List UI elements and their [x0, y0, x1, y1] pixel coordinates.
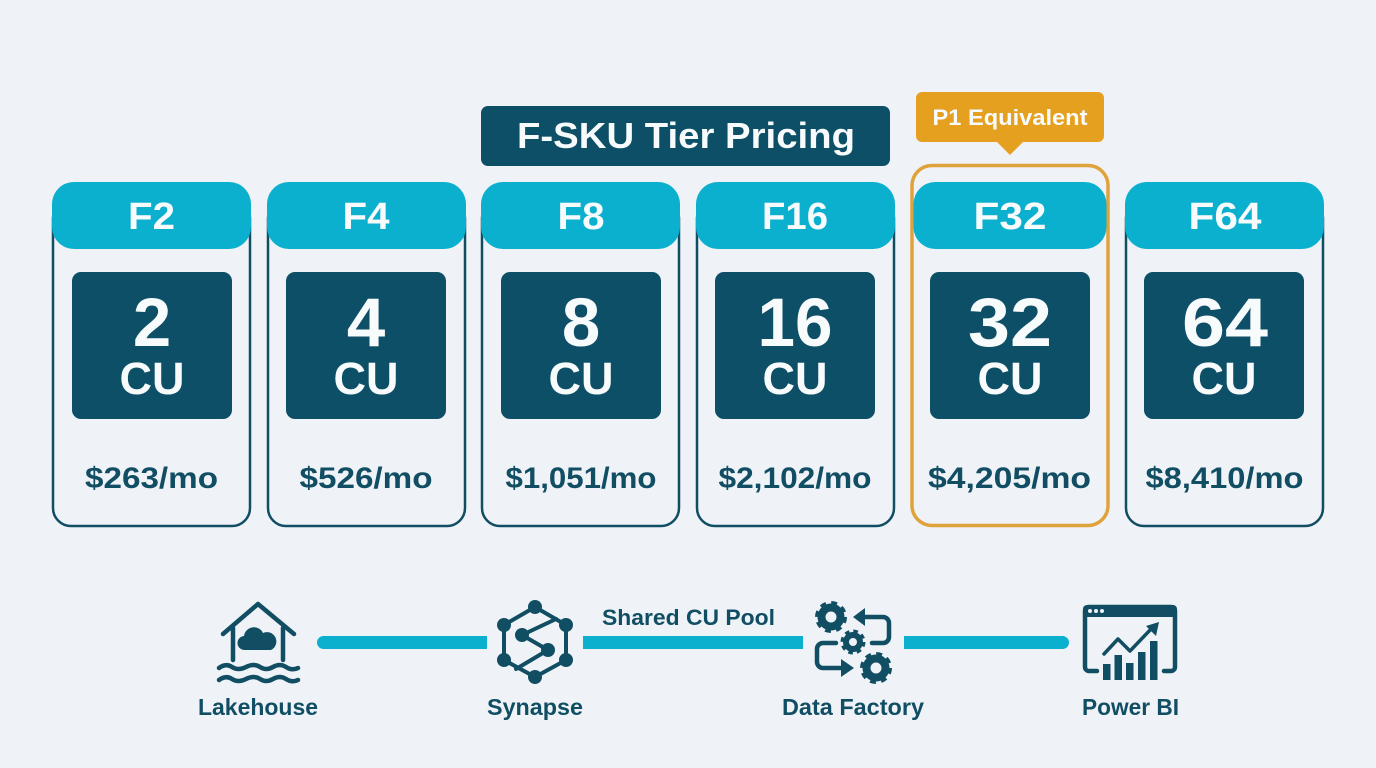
panel: F32 tier highlighted: [912, 166, 1108, 526]
16 CU box: 16: [758, 284, 832, 361]
F2 header: [52, 182, 251, 249]
32 CU box: 32: [968, 284, 1052, 361]
panel: F16 tier: [696, 182, 895, 526]
4 CU box: [286, 272, 446, 419]
8 CU box: CU: [548, 353, 614, 404]
F16 price: $2,102/mo: [718, 462, 872, 495]
2 CU box: CU: [120, 353, 184, 404]
64 CU box: CU: [1192, 353, 1256, 404]
4 CU box: CU: [334, 353, 398, 404]
title: F-SKU Tier Pricing: [517, 115, 855, 156]
label: Lakehouse: [198, 694, 318, 720]
F2 header: F2: [128, 196, 175, 238]
16 CU box: [715, 272, 875, 419]
callout: P1 Equivalent: [916, 92, 1104, 155]
F4 header: [267, 182, 466, 249]
2 CU box: [72, 272, 232, 419]
icon: dashboard window with chart: [1083, 605, 1177, 680]
32 CU box: CU: [978, 353, 1042, 404]
F16 header: [696, 182, 895, 249]
panel: F64 tier: [1125, 182, 1324, 526]
service: Data Factory: [782, 604, 924, 720]
64 CU box: 64: [1182, 284, 1268, 361]
connector: Synapse to Data Factory: [583, 636, 803, 649]
F8 header: F8: [558, 196, 604, 238]
label: Shared CU Pool: Shared CU Pool: [602, 605, 775, 630]
F32 price: $4,205/mo: [928, 462, 1091, 495]
32 CU box: [930, 272, 1090, 419]
64 CU box: [1144, 272, 1304, 419]
title: [481, 106, 890, 166]
icon: lakehouse: [219, 604, 298, 681]
label: Synapse: [487, 694, 583, 720]
F32 header: [914, 182, 1106, 249]
label: Power BI: [1082, 694, 1179, 720]
callout: P1 Equivalent: P1 Equivalent: [932, 105, 1088, 130]
F8 price: $1,051/mo: [506, 462, 656, 495]
panel: F4 tier: [267, 182, 466, 526]
F64 header: [1125, 182, 1324, 249]
icon: gears and arrows: [817, 604, 890, 682]
connector: Data Factory to Power BI: [904, 636, 1069, 649]
F4 price: $526/mo: [300, 462, 432, 495]
8 CU box: 8: [562, 284, 600, 361]
F32 header: F32: [974, 196, 1046, 238]
8 CU box: [501, 272, 661, 419]
4 CU box: 4: [347, 284, 385, 361]
F4 header: F4: [342, 196, 390, 238]
F2 price: $263/mo: [85, 462, 218, 495]
panel: F2 tier: [52, 182, 251, 526]
2 CU box: 2: [133, 284, 171, 361]
label: Data Factory: [782, 694, 924, 720]
F64 header: F64: [1188, 196, 1262, 238]
service: Lakehouse: [198, 604, 318, 720]
connector: Lakehouse to Synapse: [317, 636, 487, 649]
F64 price: $8,410/mo: [1146, 462, 1304, 495]
16 CU box: CU: [762, 353, 828, 404]
service: Power BI: [1082, 605, 1179, 720]
panel: F8 tier: [481, 182, 680, 526]
icon: synapse network: [497, 600, 573, 684]
F8 header: [481, 182, 680, 249]
F16 header: F16: [762, 196, 828, 238]
service: Synapse: [487, 600, 583, 720]
